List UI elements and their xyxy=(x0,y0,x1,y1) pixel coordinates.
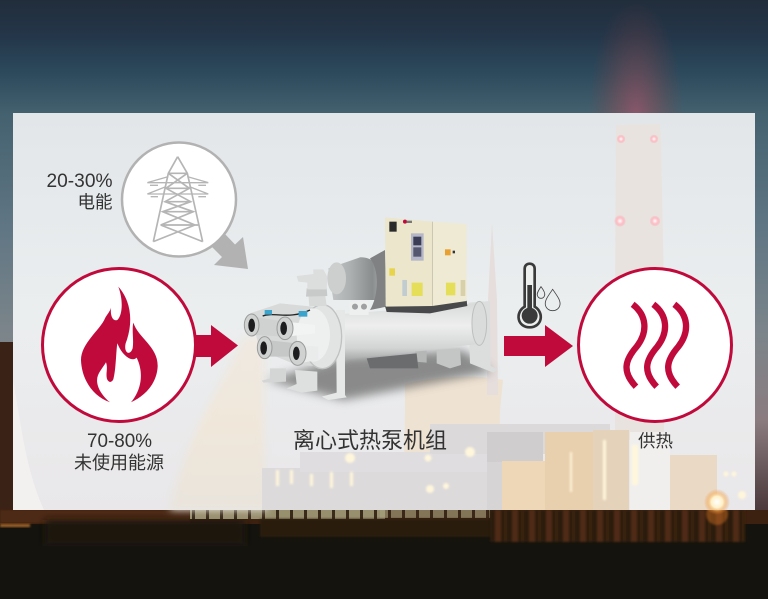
label: 20-30% electricity xyxy=(46,171,113,212)
floor shadow xyxy=(267,350,493,400)
label: 70-80% unused energy: 未使用能源 xyxy=(74,453,164,473)
head and nozzles xyxy=(244,303,342,369)
label: 20-30% electricity: 电能 xyxy=(78,192,112,212)
control cabinet xyxy=(385,217,467,307)
label: centrifugal heat pump unit: 离心式热泵机组 xyxy=(293,428,447,453)
label: 70-80% unused energy: 70-80% xyxy=(87,431,152,452)
icon: heat waves xyxy=(627,304,686,387)
wires and blue valves xyxy=(263,310,310,317)
circle: electricity tower icon xyxy=(122,142,236,256)
right flange xyxy=(472,301,487,345)
right end plate and legs xyxy=(367,301,498,373)
support legs xyxy=(262,310,347,400)
gray arrow: electricity input xyxy=(212,234,248,269)
under-cabinet parts xyxy=(385,300,467,313)
red arrow: heat output xyxy=(504,325,573,367)
gauges xyxy=(349,302,369,315)
main shell cylinder xyxy=(330,303,486,359)
label: heat supply: 供热 xyxy=(638,431,673,451)
red arrow: waste energy input xyxy=(196,325,238,367)
circle: unused energy flame icon xyxy=(42,268,196,422)
faded plant behind the panel xyxy=(13,124,746,515)
icon: thermometer and water drops xyxy=(519,264,560,327)
circle: heat supply icon xyxy=(578,268,732,422)
label: 20-30% electricity: 20-30% xyxy=(46,171,113,192)
label: 70-80% unused energy xyxy=(74,431,164,473)
translucent white panel xyxy=(13,113,755,510)
icon: transmission tower xyxy=(147,157,208,242)
icon: flame xyxy=(81,287,158,402)
centrifugal heat pump unit xyxy=(244,217,498,400)
compressor drum xyxy=(297,250,387,310)
